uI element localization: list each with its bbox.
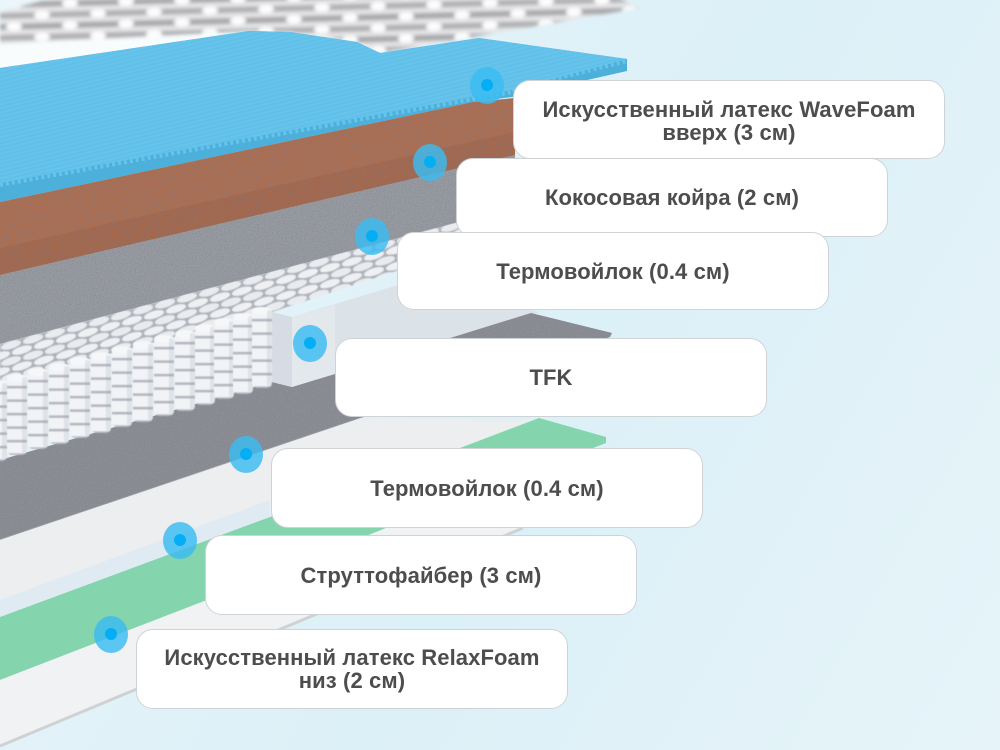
card: coconut coir: Кокосовая койра (2 см) bbox=[545, 185, 799, 210]
card: coconut coir bbox=[456, 158, 888, 237]
marker: WaveFoam bbox=[470, 67, 504, 104]
card: Struttofiber bbox=[205, 535, 637, 615]
card: WaveFoam: вверх (3 см) bbox=[662, 120, 796, 145]
card: RelaxFoam: Искусственный латекс RelaxFoam bbox=[164, 645, 540, 670]
marker: thermal felt upper bbox=[355, 218, 389, 255]
white glow behind upper layers bbox=[0, 30, 400, 75]
card: thermal felt upper bbox=[397, 232, 829, 310]
marker: thermal felt lower bbox=[229, 436, 263, 473]
layer: coconut coir bbox=[0, 98, 515, 275]
layer: TFK spring block bbox=[0, 223, 612, 540]
foam corner bbox=[272, 312, 292, 387]
marker: TFK bbox=[293, 325, 327, 362]
layer: quilted cover bbox=[0, 0, 639, 53]
marker: Struttofiber bbox=[163, 522, 197, 559]
lower thermal felt surface bbox=[0, 313, 612, 540]
layer: thermal felt upper bbox=[0, 155, 515, 344]
layer: WaveFoam blue latex bbox=[0, 31, 627, 202]
block: foam side right bbox=[292, 285, 540, 390]
marker: coconut coir bbox=[413, 144, 447, 181]
card: WaveFoam: Искусственный латекс WaveFoam bbox=[542, 97, 915, 122]
marker: RelaxFoam bbox=[94, 616, 128, 653]
card: Struttofiber: Струттофайбер (3 см) bbox=[301, 562, 541, 588]
card: thermal felt lower bbox=[271, 448, 703, 528]
layer: RelaxFoam white bottom bbox=[0, 528, 523, 746]
layer: Struttofiber white bbox=[0, 418, 540, 617]
spring tops bbox=[0, 223, 520, 382]
card: RelaxFoam: низ (2 см) bbox=[299, 668, 405, 693]
layer: green foam bbox=[0, 418, 606, 680]
spring columns bbox=[0, 307, 272, 461]
card: WaveFoam bbox=[513, 80, 945, 159]
card: TFK bbox=[335, 338, 767, 417]
card: thermal felt lower: Термовойлок (0.4 см) bbox=[370, 476, 604, 500]
card: TFK: TFK bbox=[529, 365, 573, 390]
card: RelaxFoam bbox=[136, 629, 568, 709]
card: thermal felt upper: Термовойлок (0.4 см) bbox=[496, 258, 730, 284]
